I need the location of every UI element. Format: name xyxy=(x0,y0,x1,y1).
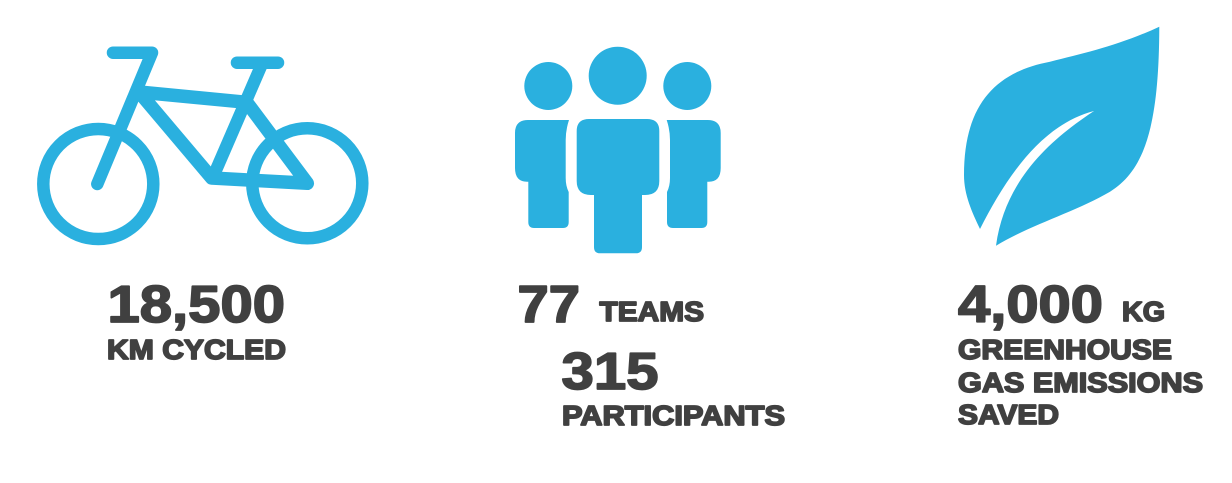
icon: leaf xyxy=(964,27,1159,246)
label: saved: SAVED xyxy=(958,399,1059,430)
label: greenhouse: GREENHOUSE xyxy=(958,334,1172,365)
label: participants: PARTICIPANTS xyxy=(562,400,785,431)
panel: kilometres cycled xyxy=(43,53,362,365)
label: teams: TEAMS xyxy=(600,296,704,327)
stat: 4,000: 4,000 xyxy=(958,276,1103,334)
icon: three people xyxy=(515,47,721,253)
label: kg: KG xyxy=(1122,296,1165,327)
label: km cycled: KM CYCLED xyxy=(107,334,286,365)
stat: 77: 77 xyxy=(518,276,580,334)
stat: 315: 315 xyxy=(562,343,658,401)
icon: bicycle xyxy=(43,53,362,239)
stat: 18,500: 18,500 xyxy=(108,276,285,334)
label: gas emissions: GAS EMISSIONS xyxy=(958,367,1203,398)
panel: greenhouse gas saved xyxy=(958,27,1203,430)
panel: teams and participants xyxy=(515,47,785,431)
